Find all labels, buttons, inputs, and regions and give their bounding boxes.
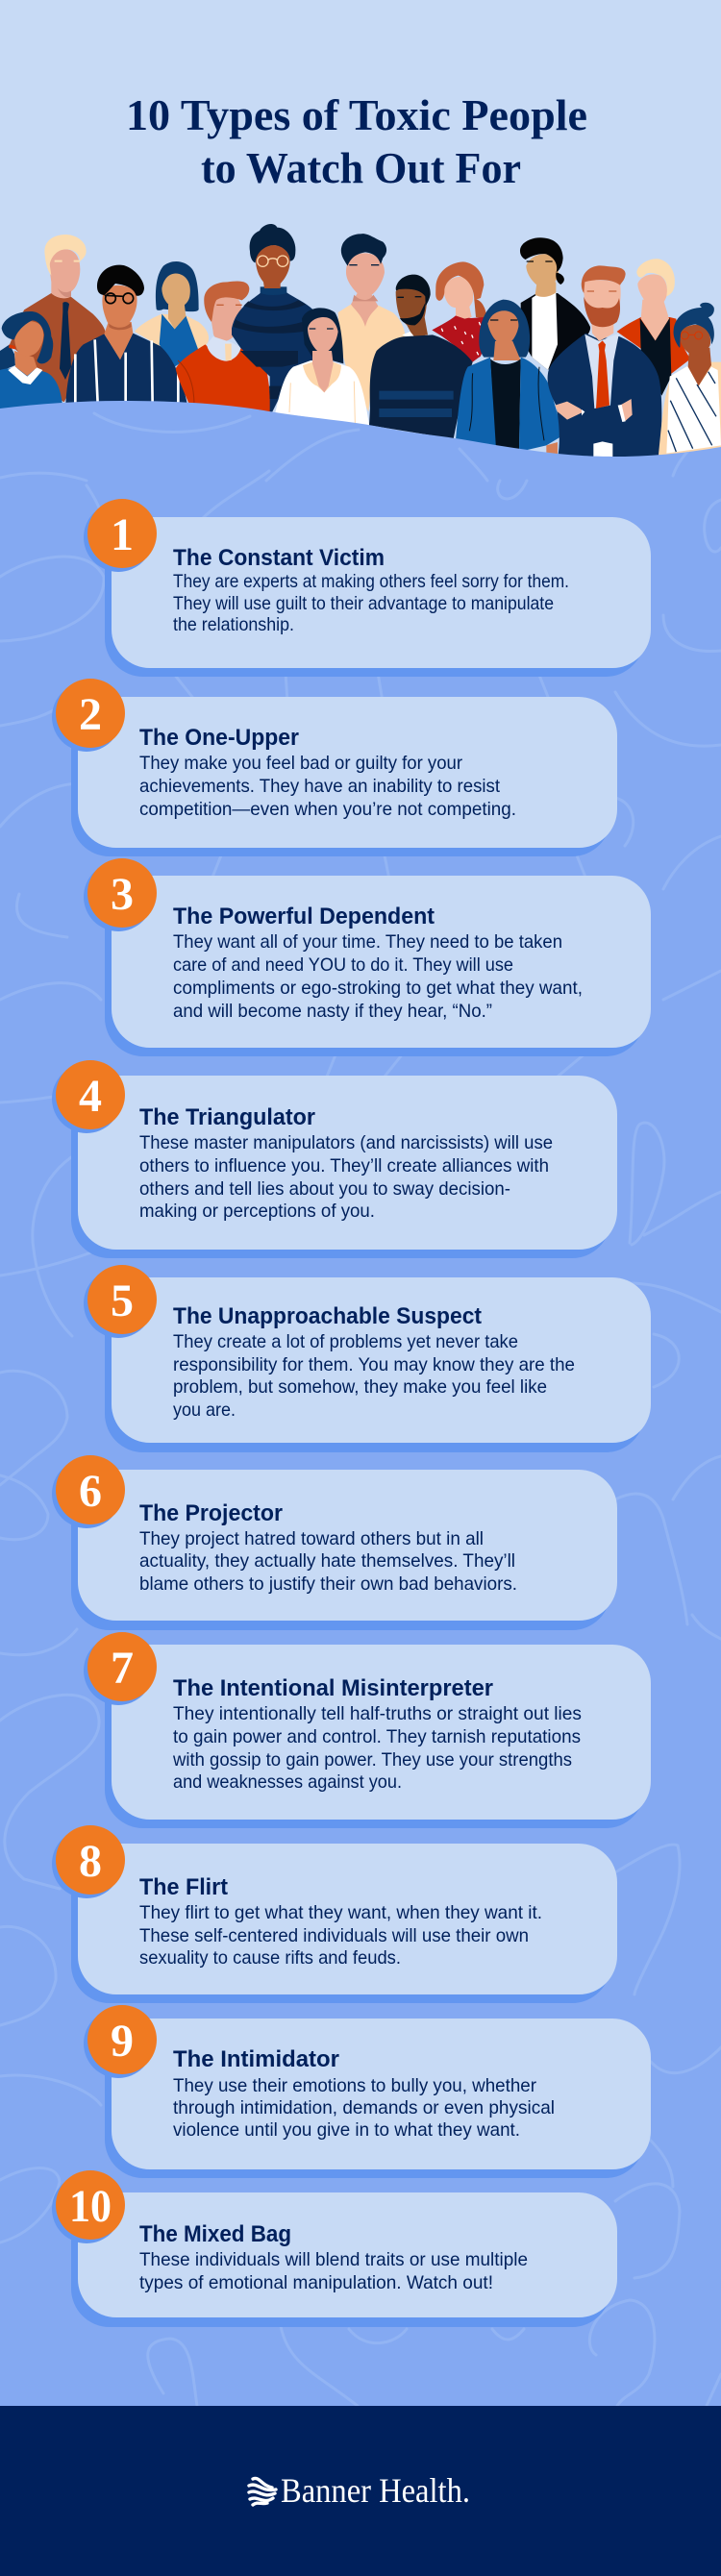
number badge 4 bbox=[52, 1060, 125, 1133]
text: The Mixed Bag: These individuals will blend traits or use multiple bbox=[139, 2249, 528, 2270]
number badge 5 bbox=[84, 1265, 157, 1338]
title: to Watch Out For bbox=[201, 144, 521, 192]
text: The Flirt bbox=[139, 1874, 542, 1969]
title bbox=[126, 91, 587, 192]
number badge 1: 1 bbox=[111, 509, 134, 560]
text: The Intentional Misinterpreter: They intentionally tell half-truths or straight out lies bbox=[173, 1703, 582, 1724]
text: The Mixed Bag bbox=[139, 2221, 528, 2293]
text: The One-Upper: competition—even when you’re not competing. bbox=[139, 799, 516, 820]
text: The Powerful Dependent bbox=[173, 904, 583, 1022]
icon: waving banner bbox=[249, 2478, 276, 2505]
text: The Intentional Misinterpreter: The Intentional Misinterpreter bbox=[173, 1675, 493, 1701]
text: The Triangulator bbox=[139, 1104, 553, 1222]
number badge 7: 7 bbox=[111, 1643, 134, 1694]
text: The One-Upper: achievements. They have an inability to resist bbox=[139, 776, 501, 797]
text: The Projector: They project hatred toward others but in all bbox=[139, 1528, 484, 1549]
text: The Projector bbox=[139, 1500, 517, 1595]
panel: card 5 The Unapproachable Suspect bbox=[84, 1265, 651, 1452]
title: 10 Types of Toxic People bbox=[126, 91, 587, 139]
text: The Flirt: The Flirt bbox=[139, 1874, 228, 1900]
panel: card 6 The Projector bbox=[52, 1455, 617, 1630]
text: The Unapproachable Suspect: responsibility for them. You may know they are the bbox=[173, 1354, 575, 1375]
text: The Projector: actuality, they actually hate themselves. They’ll bbox=[139, 1550, 515, 1572]
number badge 3 bbox=[84, 858, 157, 931]
number badge 5: 5 bbox=[111, 1276, 134, 1326]
text: The Intimidator: through intimidation, demands or even physical bbox=[173, 2097, 555, 2118]
text: The Powerful Dependent: The Powerful Dependent bbox=[173, 904, 435, 929]
text: The Projector: The Projector bbox=[139, 1500, 283, 1526]
number badge 2 bbox=[52, 679, 125, 752]
text: The Triangulator: These master manipulators (and narcissists) will use bbox=[139, 1132, 553, 1153]
panel: card 9 The Intimidator bbox=[84, 2005, 651, 2178]
text: The Triangulator: others to influence you. They’ll create alliances with bbox=[139, 1155, 549, 1177]
text: The Intentional Misinterpreter: with gossip to gain power. They use your strengths bbox=[172, 1749, 572, 1771]
text: The Unapproachable Suspect: problem, but somehow, they make you feel like bbox=[173, 1376, 547, 1398]
number badge 2: 2 bbox=[79, 689, 102, 740]
text: The Mixed Bag: types of emotional manipulation. Watch out! bbox=[139, 2272, 493, 2293]
number badge 8: 8 bbox=[79, 1836, 102, 1887]
panel: card 8 The Flirt bbox=[52, 1825, 617, 2003]
text: The Flirt: These self-centered individuals will use their own bbox=[139, 1925, 529, 1946]
text: The Intentional Misinterpreter: to gain power and control. They tarnish reputations bbox=[173, 1726, 581, 1747]
text: The One-Upper: They make you feel bad or guilty for your bbox=[139, 753, 462, 774]
text: The Unapproachable Suspect bbox=[173, 1303, 575, 1421]
number badge 6: 6 bbox=[79, 1466, 102, 1517]
number badge 3: 3 bbox=[111, 869, 134, 920]
text: The Constant Victim: The Constant Victim bbox=[173, 545, 385, 571]
number badge 9: 9 bbox=[111, 2016, 134, 2067]
panel: card 4 The Triangulator bbox=[52, 1060, 617, 1258]
number badge 10: 10 bbox=[69, 2181, 112, 2232]
panel: card 1 The Constant Victim bbox=[84, 499, 651, 677]
text: The Unapproachable Suspect: you are. bbox=[173, 1399, 236, 1421]
text: The Unapproachable Suspect: The Unapproachable Suspect bbox=[173, 1303, 482, 1329]
text: The One-Upper bbox=[139, 725, 516, 820]
illustration: group of people bbox=[0, 224, 721, 458]
text: The Powerful Dependent: They want all of your time. They need to be taken bbox=[173, 931, 562, 953]
footer logo: Banner Health: Banner Health. bbox=[281, 2471, 470, 2510]
panel: card 3 The Powerful Dependent bbox=[84, 858, 651, 1056]
text: The Intimidator bbox=[173, 2046, 555, 2141]
text: The Constant Victim bbox=[173, 545, 569, 635]
panel: card 7 The Intentional Misinterpreter bbox=[84, 1632, 651, 1828]
text: The Triangulator: making or perceptions of you. bbox=[139, 1201, 375, 1222]
panel: card 10 The Mixed Bag bbox=[52, 2170, 617, 2327]
text: The Powerful Dependent: care of and need YOU to do it. They will use bbox=[173, 954, 513, 976]
text: The Constant Victim: They are experts at making others feel sorry for them. bbox=[173, 571, 569, 592]
text: The Powerful Dependent: compliments or ego-stroking to get what they want, bbox=[173, 978, 583, 999]
text: The Triangulator: The Triangulator bbox=[139, 1104, 315, 1130]
number badge 6 bbox=[52, 1455, 125, 1528]
number badge 10 bbox=[52, 2170, 125, 2243]
text: The Projector: blame others to justify their own bad behaviors. bbox=[139, 1573, 517, 1595]
text: The Constant Victim: They will use guilt to their advantage to manipulate bbox=[173, 593, 554, 614]
panel: card 2 The One-Upper bbox=[52, 679, 617, 856]
text: The Intimidator: They use their emotions to bully you, whether bbox=[173, 2075, 536, 2096]
text: The Unapproachable Suspect: They create a lot of problems yet never take bbox=[173, 1331, 518, 1352]
text: The Flirt: They flirt to get what they want, when they want it. bbox=[139, 1902, 542, 1923]
number badge 9 bbox=[84, 2005, 157, 2078]
wave background bbox=[0, 401, 721, 2406]
text: The Flirt: sexuality to cause rifts and feuds. bbox=[139, 1947, 401, 1969]
text: The Mixed Bag: The Mixed Bag bbox=[139, 2221, 291, 2247]
number badge 1 bbox=[84, 499, 157, 572]
text: The Powerful Dependent: and will become nasty if they hear, “No.” bbox=[173, 1001, 492, 1022]
text: The Intimidator: violence until you give in to what they want. bbox=[173, 2119, 520, 2141]
text: The Intimidator: The Intimidator bbox=[173, 2046, 339, 2072]
number badge 7 bbox=[84, 1632, 157, 1705]
number badge 8 bbox=[52, 1825, 125, 1898]
text: The One-Upper: The One-Upper bbox=[139, 725, 299, 751]
text: The Triangulator: others and tell lies about you to sway decision- bbox=[139, 1178, 510, 1200]
text: The Intentional Misinterpreter: and weaknesses against you. bbox=[173, 1771, 402, 1793]
text: The Constant Victim: the relationship. bbox=[173, 614, 294, 635]
text: The Intentional Misinterpreter bbox=[172, 1675, 582, 1793]
footer band bbox=[0, 2406, 721, 2576]
number badge 4: 4 bbox=[79, 1071, 102, 1122]
